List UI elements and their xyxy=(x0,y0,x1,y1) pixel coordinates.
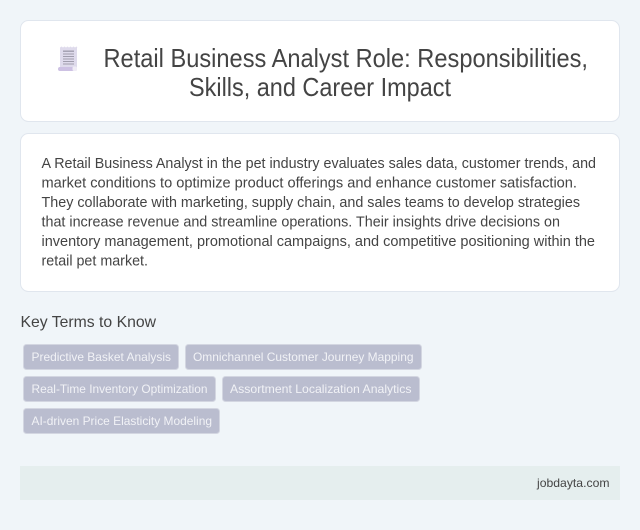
text block: description: retail pet market. xyxy=(42,254,148,270)
heading: title: Skills, and Career Impact xyxy=(189,74,451,102)
tag: assortment localization analytics: Assortment Localization Analytics xyxy=(230,382,412,396)
heading: title xyxy=(104,45,588,102)
tag: assortment localization analytics xyxy=(222,376,420,402)
text block: description: market conditions to optimize product offerings and enhance customer satisfaction. xyxy=(42,176,577,192)
text block: description: that increase revenue and streamline operations. Their insights drive decisions on xyxy=(42,214,560,230)
text block: description xyxy=(42,156,596,270)
tag: omnichannel customer journey mapping: Omnichannel Customer Journey Mapping xyxy=(193,350,414,364)
tag: predictive basket analysis xyxy=(24,344,178,370)
tag: omnichannel customer journey mapping xyxy=(186,344,422,370)
tag: ai-driven price elasticity modeling xyxy=(24,408,220,434)
tag: ai-driven price elasticity modeling: AI-driven Price Elasticity Modeling xyxy=(32,414,212,428)
heading: key terms: Key Terms to Know xyxy=(20,314,156,331)
tag: real-time inventory optimization: Real-Time Inventory Optimization xyxy=(32,382,208,396)
text block: description: They collaborate with marketing, supply chain, and sales teams to develop strategies xyxy=(42,195,580,211)
tag: real-time inventory optimization xyxy=(24,376,216,402)
heading: title: Retail Business Analyst Role: Responsibilities, xyxy=(104,45,588,73)
footer: jobdayta.com xyxy=(536,476,610,490)
text block: description: inventory management, promotional campaigns, and competitive positioning within the xyxy=(42,234,595,250)
footer xyxy=(20,466,620,500)
tag: predictive basket analysis: Predictive Basket Analysis xyxy=(32,350,171,364)
text block: description: A Retail Business Analyst in the pet industry evaluates sales data, customer trends, and xyxy=(42,156,596,172)
panel: description xyxy=(20,134,620,292)
panel: title card xyxy=(20,20,620,122)
icon: receipt document xyxy=(58,46,78,71)
